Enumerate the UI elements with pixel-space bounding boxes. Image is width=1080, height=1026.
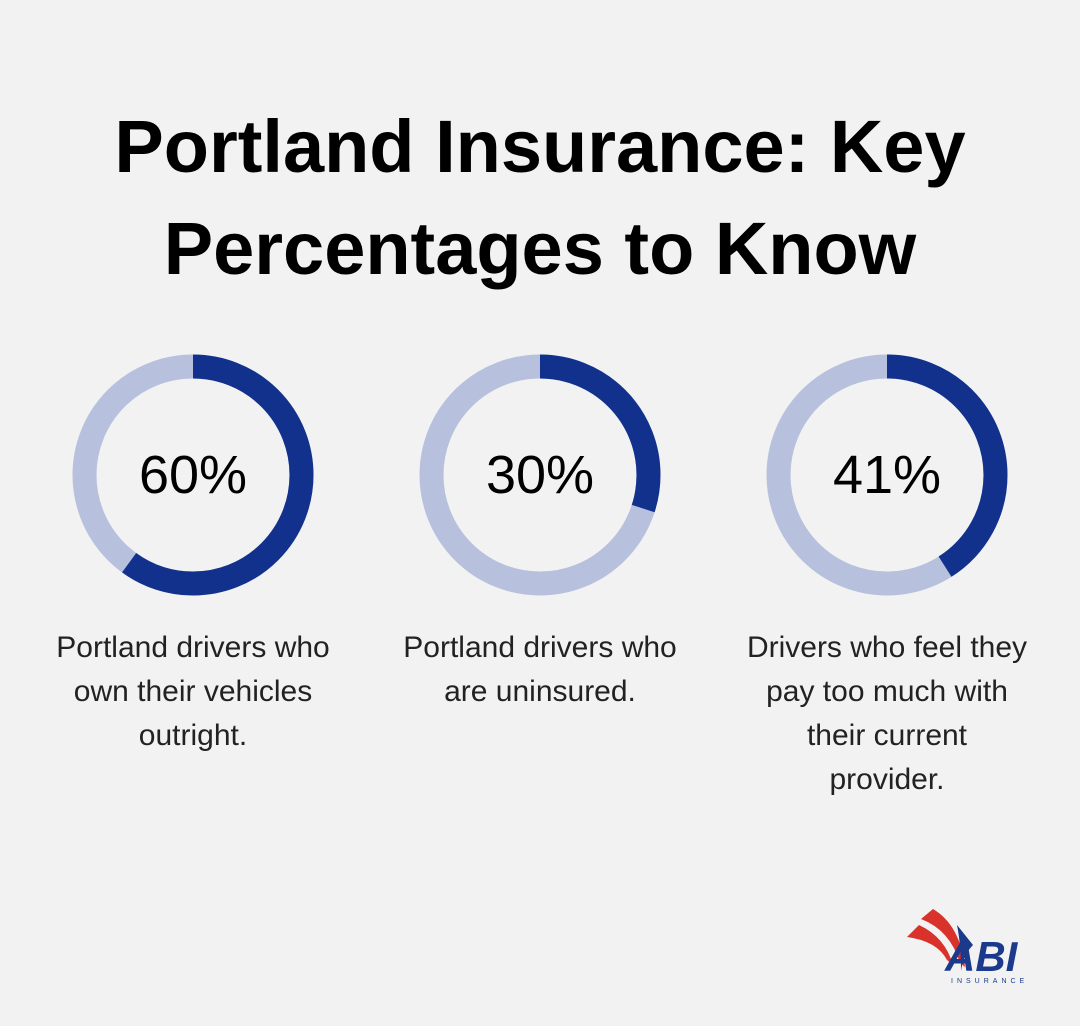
donut: 60% <box>72 354 314 596</box>
caption 2: are uninsured. <box>444 675 636 708</box>
donut: 60%: 60% <box>139 445 247 505</box>
donut: 41% <box>766 354 1008 596</box>
logo: ABI <box>945 933 1017 980</box>
donut: 41%: 41% <box>833 445 941 505</box>
caption 1: Portland drivers who <box>56 631 330 664</box>
caption 3: provider. <box>829 763 945 796</box>
caption 3: Drivers who feel they <box>747 631 1027 664</box>
caption 2 <box>403 631 677 708</box>
title: Portland Insurance: Key <box>114 105 966 188</box>
logo <box>907 909 1028 985</box>
title: Percentages to Know <box>164 207 916 290</box>
caption 1: own their vehicles <box>74 675 312 708</box>
caption 3 <box>747 631 1027 796</box>
caption 1: outright. <box>139 719 247 752</box>
donut: 30% <box>420 354 660 596</box>
donut: 30%: 30% <box>486 445 594 505</box>
title <box>114 105 966 290</box>
caption 3: their current <box>807 719 967 752</box>
logo: INSURANCE <box>951 978 1028 985</box>
caption 2: Portland drivers who <box>403 631 677 664</box>
caption 3: pay too much with <box>766 675 1008 708</box>
caption 1 <box>56 631 330 752</box>
